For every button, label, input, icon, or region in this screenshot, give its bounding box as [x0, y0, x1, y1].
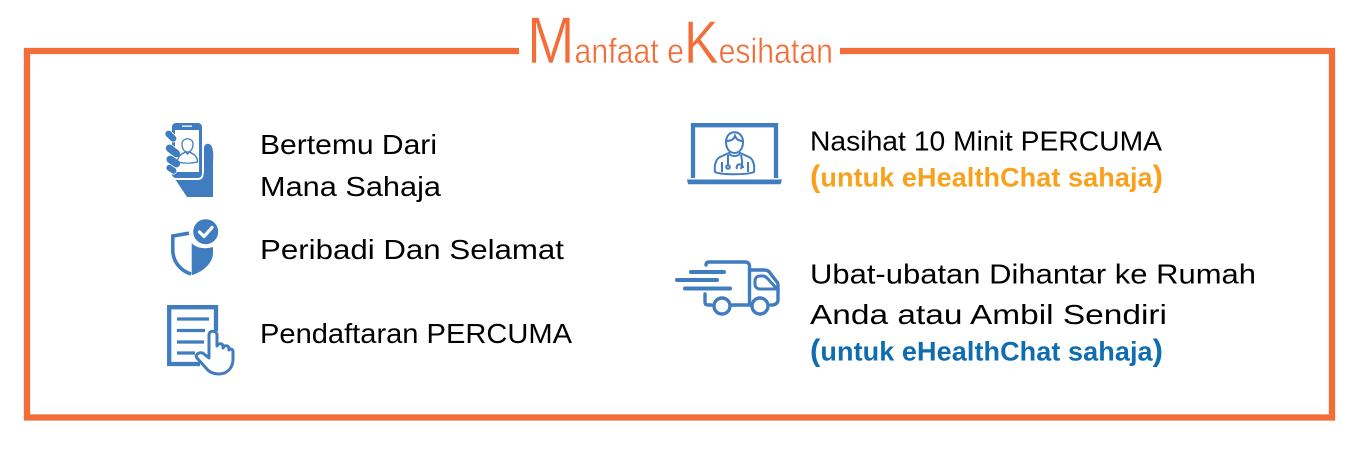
text block: free 10-minute advice [810, 126, 1163, 194]
icon: delivery truck [677, 262, 778, 314]
text block: free 10-minute advice: (untuk eHealthChat sahaja) [810, 159, 1163, 194]
text block: left benefits: Mana Sahaja [260, 171, 442, 202]
text block: left benefits [260, 129, 573, 349]
text block: left benefits: Peribadi Dan Selamat [260, 234, 564, 265]
text block: medicine delivery [810, 258, 1256, 368]
text block: medicine delivery: Anda atau Ambil Sendiri [810, 299, 1167, 330]
icon: doctor on laptop [687, 125, 782, 184]
orange frame [27, 51, 1332, 418]
text block: left benefits: Bertemu Dari [260, 129, 437, 160]
text block: medicine delivery: Ubat-ubatan Dihantar ke Rumah [810, 258, 1256, 290]
text block: left benefits: Pendaftaran PERCUMA [260, 318, 573, 349]
icon: hand holding phone [164, 122, 213, 197]
icon: shield with check [173, 219, 218, 275]
title: Manfaat eKesihatan [527, 3, 833, 77]
icon: document with pointing hand [169, 307, 233, 374]
text block: free 10-minute advice: Nasihat 10 Minit PERCUMA [810, 126, 1163, 156]
text block: medicine delivery: (untuk eHealthChat sahaja) [810, 332, 1163, 368]
